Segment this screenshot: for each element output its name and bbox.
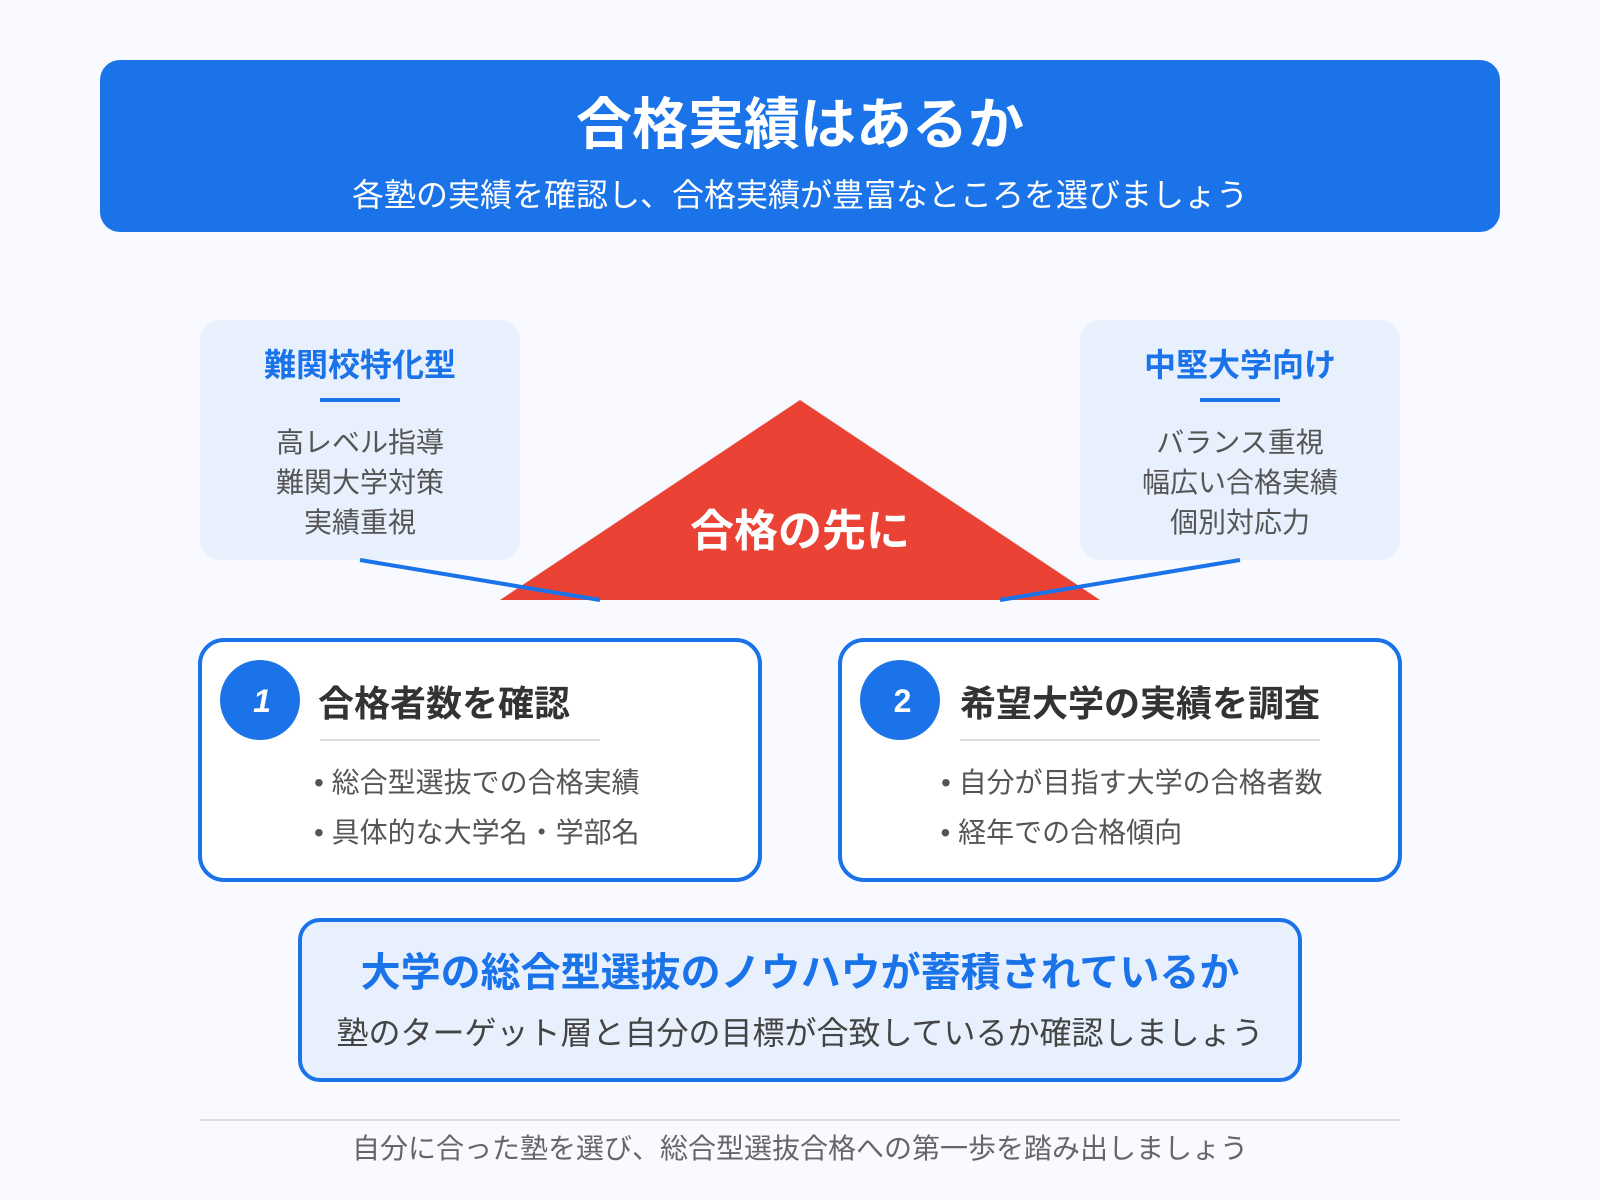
card bullets: • 総合型選抜での合格実績 — [314, 767, 640, 798]
triangle: 合格の先に: 合格の先に — [690, 507, 910, 556]
panel text: バランス重視 — [1156, 427, 1324, 458]
number badge 2: 2 — [894, 683, 911, 719]
card heading: 合格者数を確認 — [318, 683, 570, 724]
callout box — [300, 920, 1300, 1080]
card bullets — [940, 767, 1323, 848]
panel text: 実績重視 — [304, 507, 416, 538]
panel text — [276, 427, 444, 538]
card 1: 合格者数を確認 — [200, 640, 760, 880]
panel heading: 難関校特化型 — [264, 347, 456, 383]
callout text: 塾のターゲット層と自分の目標が合致しているか確認しましょう — [336, 1015, 1264, 1051]
number badge 1 — [220, 660, 300, 740]
number badge 2 — [860, 660, 940, 740]
panel: 難関校特化型 — [200, 320, 520, 560]
footer: 自分に合った塾を選び、総合型選抜合格への第一歩を踏み出しましょう — [352, 1133, 1248, 1164]
connector: right panel to triangle — [1000, 560, 1240, 600]
panel text: 高レベル指導 — [276, 427, 444, 458]
panel text: 個別対応力 — [1170, 507, 1310, 538]
panel: 中堅大学向け — [1080, 320, 1400, 560]
panel text: 幅広い合格実績 — [1142, 467, 1338, 498]
subtitle: 各塾の実績を確認し、合格実績が豊富なところを選びましょう — [352, 177, 1248, 213]
card bullets: • 具体的な大学名・学部名 — [314, 817, 640, 848]
card bullets — [314, 767, 640, 848]
connector: left panel to triangle — [360, 560, 600, 600]
card heading: 希望大学の実績を調査 — [960, 683, 1320, 724]
card 2: 希望大学の実績を調査 — [840, 640, 1400, 880]
title: 合格実績はあるか — [576, 93, 1024, 156]
number badge 1: 1 — [253, 683, 271, 719]
card bullets: • 自分が目指す大学の合格者数 — [941, 767, 1323, 798]
header banner — [100, 60, 1500, 232]
panel text — [1142, 427, 1338, 538]
panel text: 難関大学対策 — [276, 467, 444, 498]
callout heading: 大学の総合型選抜のノウハウが蓄積されているか — [361, 951, 1239, 995]
card bullets: • 経年での合格傾向 — [940, 817, 1182, 848]
triangle: 合格の先に — [500, 400, 1100, 600]
panel heading: 中堅大学向け — [1144, 347, 1336, 383]
